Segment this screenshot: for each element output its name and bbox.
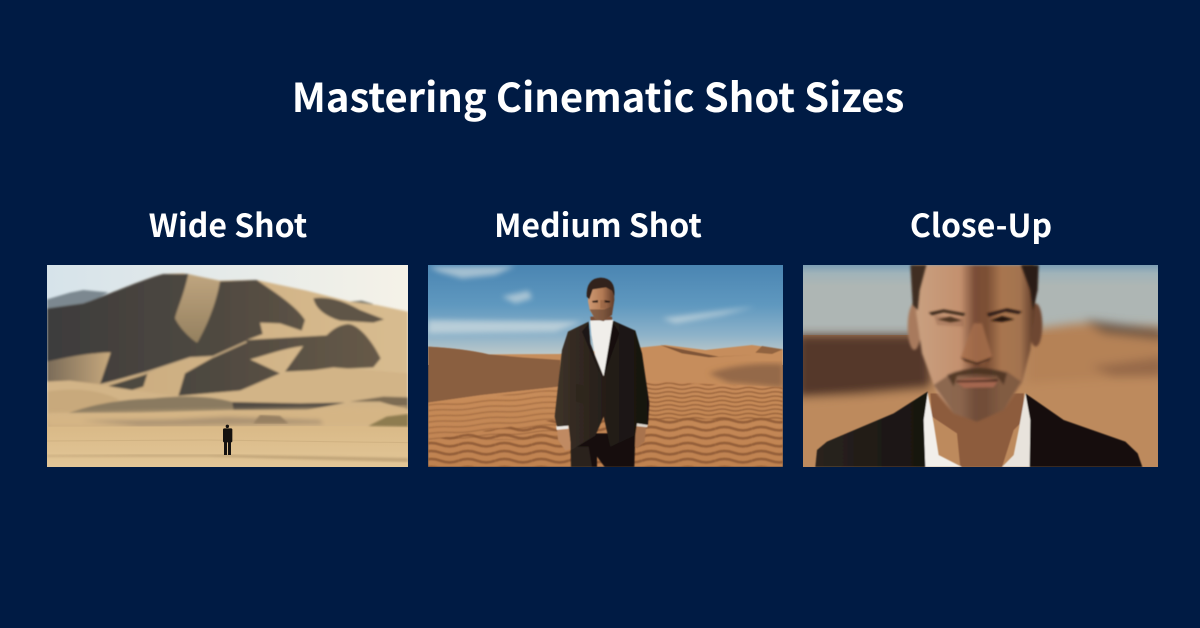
- title: Mastering Cinematic Shot Sizes: [292, 66, 904, 124]
- heading: close-up: Close-Up: [910, 201, 1052, 247]
- hair: [910, 265, 926, 310]
- jacket: [555, 321, 649, 450]
- heading: wide shot: Wide Shot: [149, 201, 307, 247]
- heading: medium shot: Medium Shot: [494, 201, 702, 247]
- jacket and shirt: [815, 392, 1142, 467]
- head: [588, 278, 614, 321]
- trousers: [570, 433, 635, 467]
- face: [915, 265, 1034, 422]
- nostrils and lips: [960, 357, 992, 365]
- eye sockets: [934, 315, 964, 327]
- ears: [908, 303, 921, 350]
- man in suit: [555, 278, 649, 467]
- hands: [557, 427, 574, 451]
- eyes: [937, 317, 962, 322]
- nose highlight: [961, 323, 992, 363]
- shaded dune faces: [47, 274, 381, 396]
- image: close-up of man's face: [583, 265, 1158, 467]
- image: medium shot of man in suit in desert: [428, 265, 1060, 467]
- figure: [223, 425, 232, 455]
- image: wide shot of dunes with small figure: [47, 265, 408, 467]
- stubble: [934, 367, 1021, 422]
- brows: [929, 309, 965, 316]
- sunlit dune body: [47, 273, 408, 467]
